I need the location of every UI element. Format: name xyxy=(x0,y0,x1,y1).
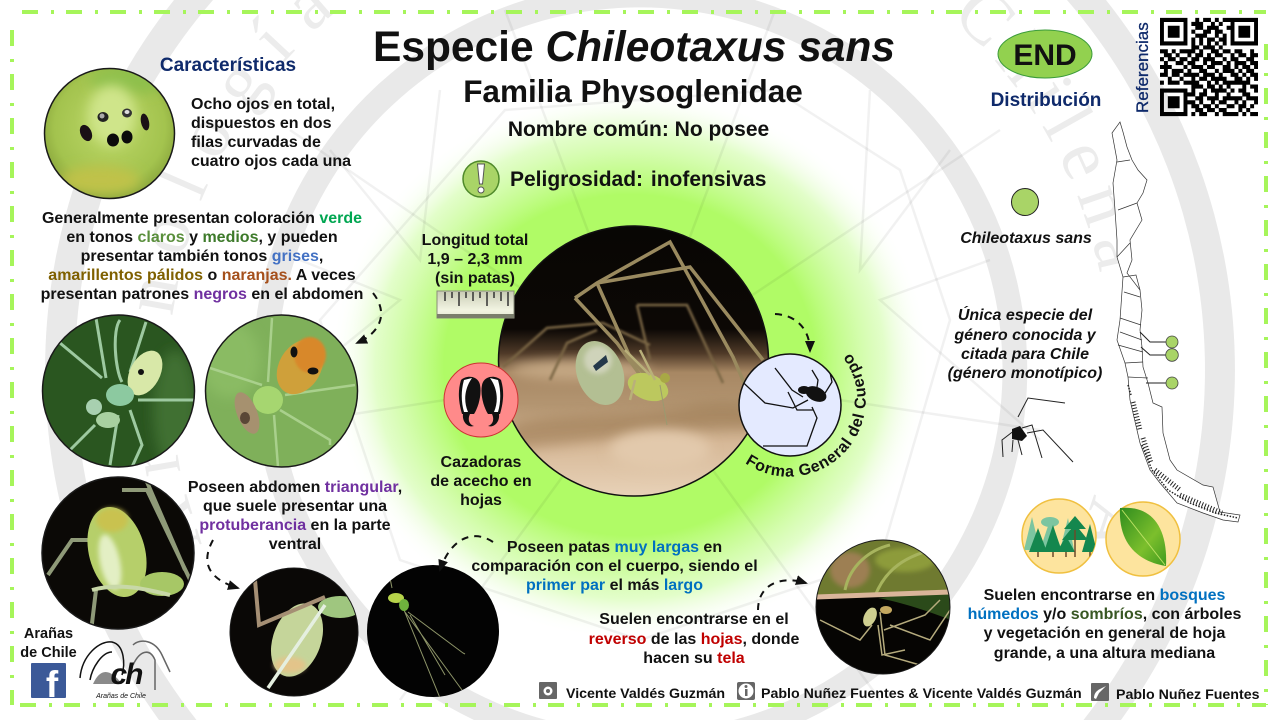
photo: orange spider on leaf xyxy=(200,315,358,468)
text: eyes: filas curvadas de xyxy=(191,134,321,151)
text: coloration: Generalmente presentan coloración verde xyxy=(42,210,362,227)
text: eyes: cuatro ojos cada una xyxy=(191,153,351,170)
text: hunters: de acecho en xyxy=(430,473,532,490)
label: references: Referencias xyxy=(1133,22,1152,113)
icon: Facebook: f xyxy=(46,664,59,705)
text: habitat: Suelen encontrarse en bosques xyxy=(984,587,1225,604)
text: underside of leaves: hacen su tela xyxy=(643,650,745,667)
main photo: spider on sand xyxy=(498,226,770,497)
conservation badge: END xyxy=(1013,39,1077,72)
credits xyxy=(539,682,1260,703)
watermark web lines xyxy=(240,10,1040,700)
credit: illustration: Pablo Nuñez Fuentes xyxy=(1116,687,1260,703)
family heading: Familia Physoglenidae xyxy=(463,73,803,109)
text: habitat: y vegetación en general de hoja xyxy=(984,625,1226,642)
label: general body shape: Forma General del Cuerpo xyxy=(746,354,866,477)
icon: Facebook xyxy=(31,663,66,705)
icon: camera xyxy=(539,682,557,699)
icon: spider silhouette xyxy=(1002,398,1073,462)
text: coloration: presentar también tonos grises, xyxy=(81,248,323,265)
text: monotypic genus: Única especie del xyxy=(958,305,1093,324)
icon: danger exclamation xyxy=(463,161,499,197)
arrow: legs to photo xyxy=(440,536,493,570)
title: Especie Chileotaxus sans xyxy=(373,24,895,71)
text: eyes: Ocho ojos en total, xyxy=(191,96,335,113)
icon: brush xyxy=(1091,683,1109,701)
text: legs: primer par el más largo xyxy=(526,577,703,594)
map of Chile xyxy=(1112,122,1240,522)
text: abdomen: ventral xyxy=(269,536,321,553)
text: underside of leaves: Suelen encontrarse en el xyxy=(599,611,789,628)
text: habitat: húmedos y/o sombríos, con árboles xyxy=(968,606,1241,623)
common name: Nombre común: No posee xyxy=(508,118,769,141)
map markers xyxy=(1140,332,1178,389)
text: coloration: amarillentos pálidos o naranjas. A veces xyxy=(48,267,356,284)
text: Facebook page name: Arañas xyxy=(24,626,73,642)
text: habitat: grande, a una altura mediana xyxy=(994,645,1215,662)
text: coloration: presentan patrones negros en el abdomen xyxy=(41,286,363,303)
logo: Arañas de Chile xyxy=(80,641,170,700)
text: hunters: Cazadoras xyxy=(441,454,522,471)
danger level: Peligrosidad: inofensivas xyxy=(510,168,766,191)
text: Facebook page name: de Chile xyxy=(20,645,77,661)
photo: long-legged spider xyxy=(366,564,500,698)
green glow behind central photo xyxy=(330,90,930,640)
photo: spider under leaf xyxy=(815,540,951,676)
text: eyes: dispuestos en dos xyxy=(191,115,332,132)
heading: distribution: Distribución xyxy=(991,90,1101,111)
icon: forest habitat xyxy=(1022,499,1097,573)
conservation badge xyxy=(998,30,1092,78)
legend label: Chileotaxus sans xyxy=(960,230,1092,247)
arrow: to body shape xyxy=(775,314,810,351)
text: monotypic genus: (género monotípico) xyxy=(948,365,1102,382)
text: coloration: en tonos claros y medios, y pueden xyxy=(66,229,338,246)
text: abdomen: Poseen abdomen triangular, xyxy=(188,479,402,496)
icon: general body shape xyxy=(733,354,841,456)
icon: chelicerae xyxy=(444,363,518,437)
arrow: coloration to photo xyxy=(357,293,381,343)
photo: eyes xyxy=(44,66,176,200)
credit: information: Pablo Nuñez Fuentes & Vicente Valdés Guzmán xyxy=(761,686,1082,702)
logo: Arañas de Chile: ch xyxy=(110,658,143,691)
text: underside of leaves: reverso de las hojas, donde xyxy=(589,631,799,648)
text: monotypic genus: género conocida y xyxy=(953,327,1097,344)
QR code xyxy=(1160,20,1258,114)
photo: abdomen close-up xyxy=(42,477,195,640)
legend marker xyxy=(1012,188,1038,216)
photo: green spider on leaf xyxy=(42,315,197,470)
text: total length: Longitud total xyxy=(422,232,528,249)
text: abdomen: protuberancia en la parte xyxy=(199,517,391,534)
background watermark logo: A xyxy=(1089,494,1114,538)
text: total length: 1,9 – 2,3 mm xyxy=(427,251,523,268)
text: monotypic genus: citada para Chile xyxy=(961,346,1089,363)
text: legs: comparación con el cuerpo, siendo el xyxy=(471,558,758,575)
heading: characteristics: Características xyxy=(160,55,296,76)
arrow: leaf text to photo xyxy=(758,580,806,610)
text: hunters: hojas xyxy=(460,492,502,509)
icon: leaf habitat xyxy=(1106,502,1180,576)
icon: ruler xyxy=(437,291,514,318)
credit: photos: Vicente Valdés Guzmán xyxy=(566,686,725,702)
logo: Arañas de Chile: Arañas de Chile xyxy=(95,693,146,700)
text: legs: Poseen patas muy largas en xyxy=(507,539,722,556)
text: total length: (sin patas) xyxy=(435,270,515,287)
photo: ventral abdomen xyxy=(229,567,362,697)
text: abdomen: que suele presentar una xyxy=(203,498,387,515)
arrow: abdomen to photo xyxy=(207,540,238,588)
icon: information xyxy=(737,682,755,700)
